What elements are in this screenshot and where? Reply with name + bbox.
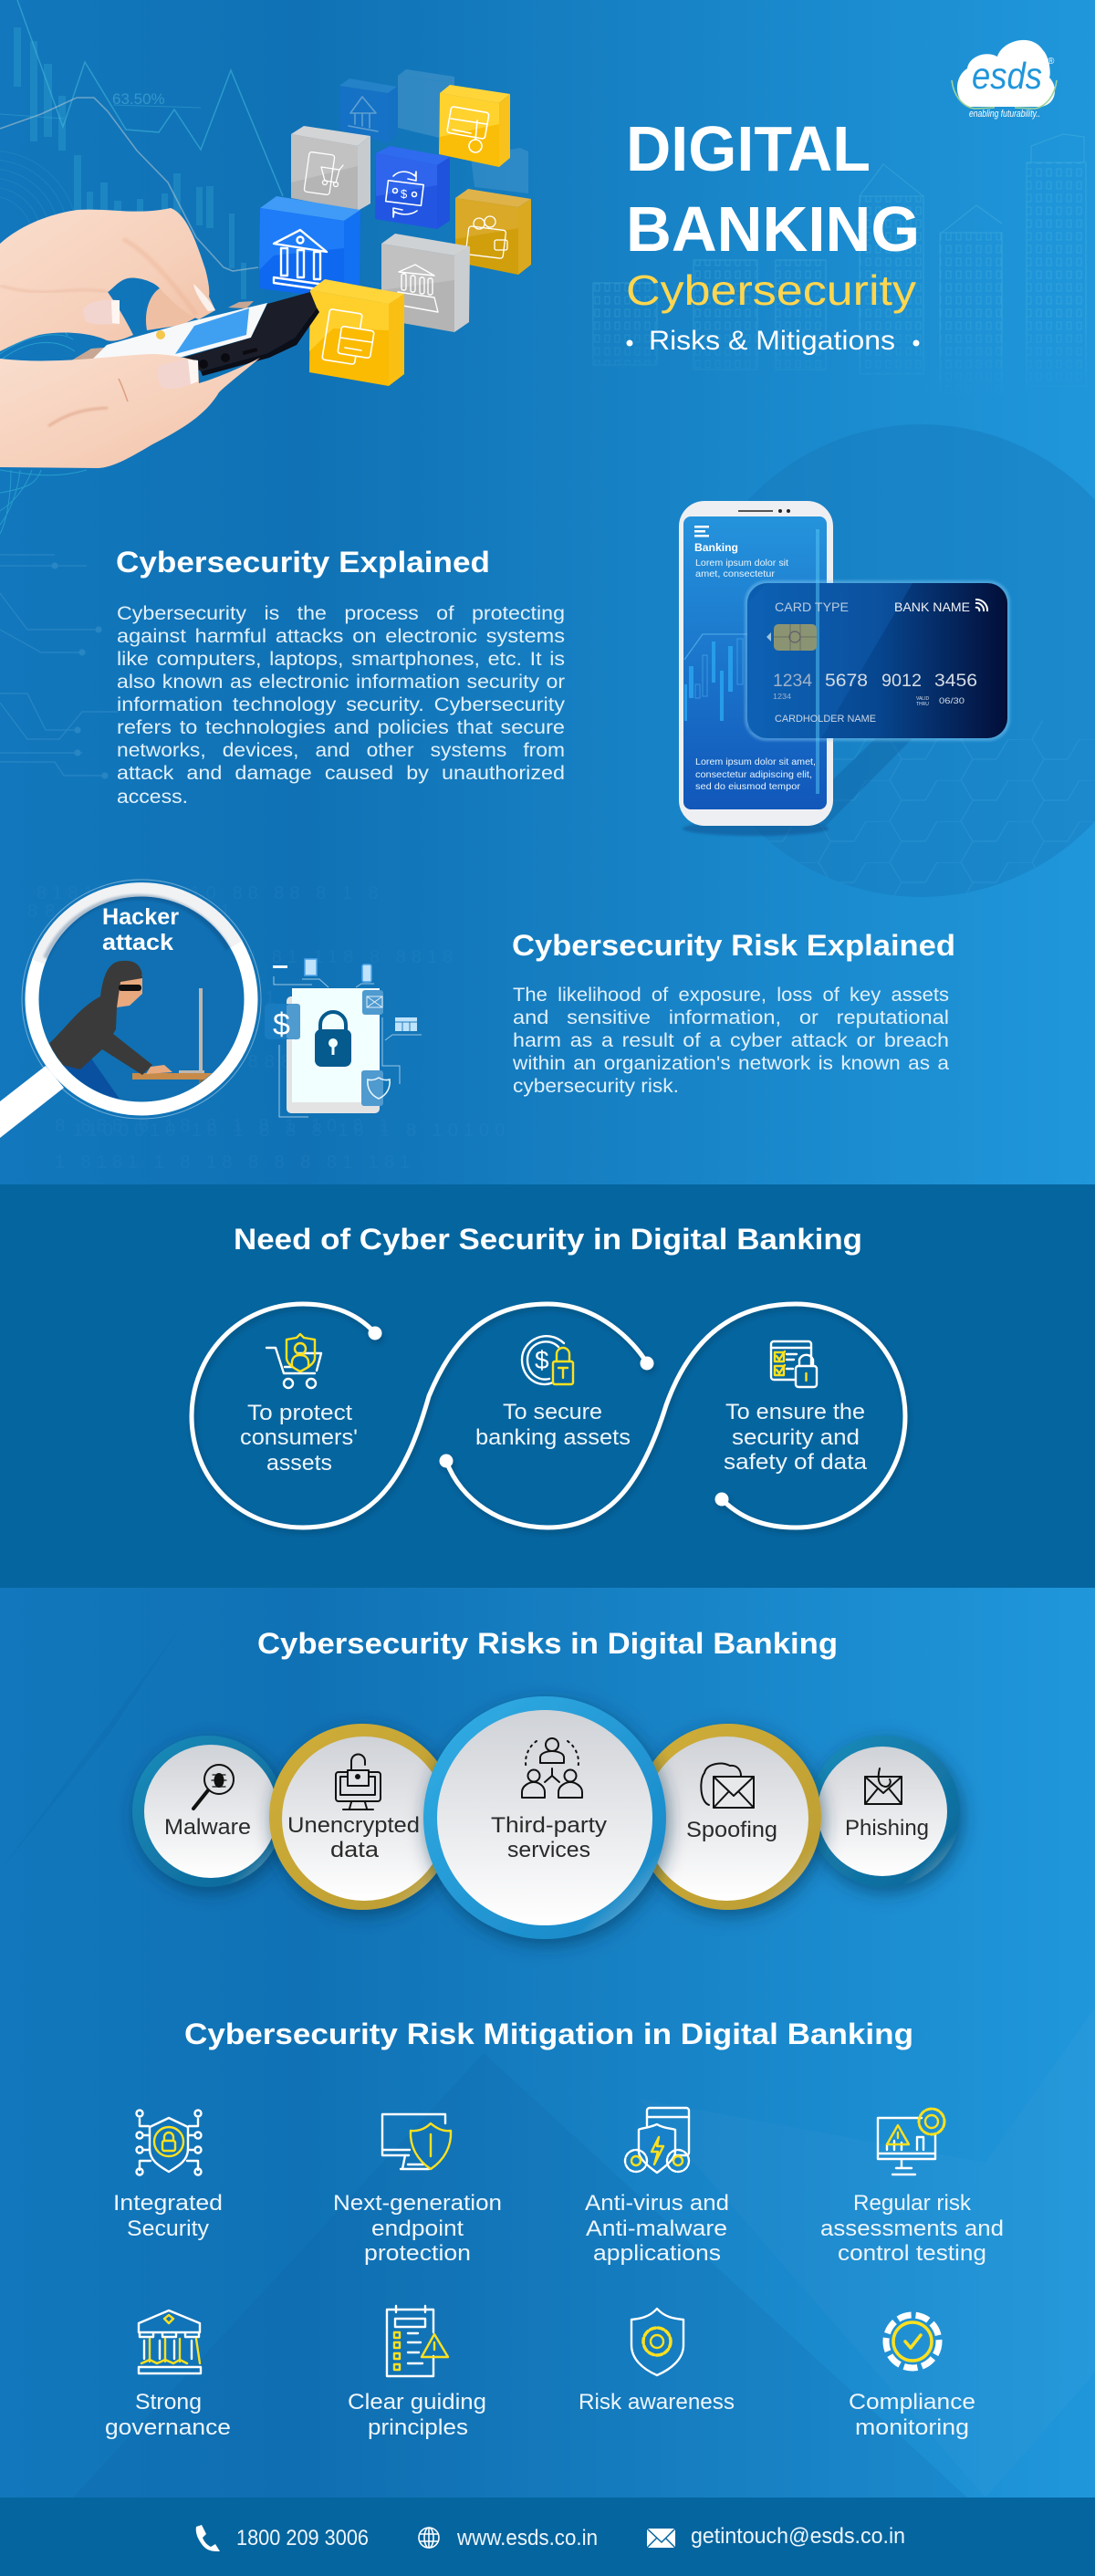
icon: phone <box>196 2525 220 2551</box>
hand: top <box>0 208 215 351</box>
item: antivirus <box>585 2108 729 2266</box>
magnifying glass: attack <box>102 930 173 955</box>
item: antivirus: applications <box>593 2241 721 2266</box>
text block: against harmful attacks on electronic systems <box>117 625 565 647</box>
icon: monitor shield <box>382 2114 451 2169</box>
text block: harm as a result of a cyber attack or breach <box>513 1029 949 1051</box>
logo: ® <box>1048 57 1055 67</box>
item: strong governance: Strong <box>135 2390 202 2414</box>
risk: phishing <box>808 1736 960 1887</box>
phone and bank card illustration <box>679 501 1010 836</box>
panel: need of cyber security <box>0 1184 1095 1588</box>
mobile phone <box>64 292 319 376</box>
heading: Cybersecurity Risks in Digital Banking <box>257 1627 838 1660</box>
faint cube <box>471 148 528 193</box>
security device <box>265 959 422 1117</box>
yellow cube: card key <box>439 85 510 167</box>
binary pattern: 81811 1 1 110 88 88 8 1 8 <box>36 883 384 903</box>
hand: bottom <box>0 354 260 468</box>
chart background: 63.50% <box>112 90 165 108</box>
bank card: CARDHOLDER NAME <box>775 714 876 725</box>
icon: bug magnifier <box>193 1765 234 1809</box>
panel: risk mitigation <box>105 2018 1004 2440</box>
binary pattern: 8188 8 8 8 888 8 81 118 8 8818 <box>36 947 458 967</box>
text block: and sensitive information, or reputational <box>513 1006 949 1028</box>
item: guiding principles <box>348 2306 486 2440</box>
title: DIGITAL <box>626 113 871 184</box>
item: endpoint protection: Next-generation <box>333 2191 502 2216</box>
bank card: 5678 <box>825 672 868 691</box>
binary pattern: 88 1 11010 81 <box>27 902 237 922</box>
bank card: 9012 <box>881 672 922 691</box>
item: compliance monitoring: Compliance <box>849 2390 975 2414</box>
bank card: 1234 <box>773 672 812 691</box>
text block: access. <box>117 786 188 808</box>
risk: third-party services: services <box>507 1838 590 1862</box>
phone: amet, consectetur <box>695 568 776 579</box>
item: antivirus: Anti-virus and <box>585 2191 729 2216</box>
heading: Cybersecurity Explained <box>116 546 490 579</box>
bank card: CARD TYPE <box>775 600 849 614</box>
footer <box>0 2498 1095 2576</box>
logo: enabling futurability.. <box>969 109 1040 120</box>
text block: cybersecurity risk. <box>513 1075 679 1097</box>
icon: coin lock <box>522 1336 573 1384</box>
item: antivirus: Anti-malware <box>586 2216 727 2241</box>
hacker attack illustration <box>0 880 422 1138</box>
text block: The likelihood of exposure, loss of key assets <box>513 984 949 1006</box>
title: Risks & Mitigations <box>649 326 895 356</box>
risk: malware <box>132 1736 284 1887</box>
icon: globe <box>419 2528 439 2548</box>
heading: Need of Cyber Security in Digital Banking <box>234 1223 862 1256</box>
icon: checklist warning <box>387 2306 448 2376</box>
icon: cloud envelope <box>701 1764 754 1808</box>
title: BANKING <box>626 193 920 265</box>
bank card: 06/30 <box>939 696 965 705</box>
text block: refers to technologies and policies that secure <box>117 716 565 738</box>
amber cube: wallet <box>455 189 531 275</box>
hacker label: Hacker <box>102 904 179 930</box>
binary pattern: 1100010 18 1 8 8 8 18 1 8 10100 <box>73 1121 510 1141</box>
title <box>626 113 920 356</box>
text block: also known as electronic information security or <box>117 671 565 693</box>
item: security and safety <box>724 1341 868 1475</box>
item: security and safety: To ensure the <box>725 1400 865 1424</box>
panel: cybersecurity explained <box>0 546 565 808</box>
icon: mail <box>647 2529 675 2548</box>
binary pattern: 11 8118 10 181 8 1 1 8 88 <box>27 988 375 1008</box>
risk: phishing: Phishing <box>845 1816 929 1841</box>
item: guiding principles: Clear guiding <box>348 2390 486 2414</box>
panel: hero <box>0 0 1086 534</box>
item: secure banking assets <box>475 1336 631 1450</box>
bank card: THRU <box>916 702 929 707</box>
item: protect assets <box>240 1334 358 1476</box>
faint cube <box>339 78 397 143</box>
item: integrated security: Integrated <box>113 2191 223 2216</box>
text block: like computers, laptops, smartphones, etc. It is <box>117 648 565 670</box>
icon: coin lock: $ <box>535 1346 549 1374</box>
panel: big circle with hexagon pattern <box>769 424 1095 897</box>
icon: hooked envelope <box>865 1768 902 1804</box>
icon: open lock monitor <box>336 1755 381 1809</box>
logo <box>952 40 1057 120</box>
bank card <box>745 529 1010 794</box>
risk: malware: Malware <box>164 1815 251 1840</box>
phone: Lorem ipsum dolor sit <box>695 558 788 568</box>
panel: cybersecurity risk explained <box>512 929 955 1097</box>
item: endpoint protection: protection <box>364 2241 471 2266</box>
item: protect assets: consumers' <box>240 1425 358 1450</box>
item: endpoint protection: endpoint <box>371 2216 464 2241</box>
risk: spoofing <box>635 1724 821 1910</box>
risk: unencrypted data <box>269 1724 455 1910</box>
icon: gear check <box>886 2315 939 2368</box>
item: risk awareness: Risk awareness <box>579 2390 735 2414</box>
bank card: BANK NAME <box>894 600 970 614</box>
icon: monitor warning gear <box>878 2109 944 2174</box>
item: risk assessments: Regular risk <box>853 2191 972 2216</box>
icon: cart shield <box>266 1334 321 1388</box>
icon: circuit shield <box>137 2110 201 2175</box>
text block <box>117 602 565 808</box>
blue cube: money exchange: $ <box>401 187 408 201</box>
binary pattern: 1 8181 1 8 18 8 8 8 81 181 <box>55 1152 415 1173</box>
heading: Cybersecurity Risk Explained <box>512 929 955 962</box>
item: protect assets: To protect <box>247 1401 352 1425</box>
phone <box>679 501 833 836</box>
phone: sed do eiusmod tempor <box>695 781 801 792</box>
blue cube: bank <box>259 196 360 299</box>
binary pattern: 110111 1 1110 818 8 1 0 <box>36 1016 359 1036</box>
risk: unencrypted data: data <box>330 1838 380 1862</box>
bank card: 3456 <box>934 672 977 691</box>
item: strong governance: governance <box>105 2415 231 2440</box>
footer: 1800 209 3006 <box>236 2526 369 2550</box>
text block: Cybersecurity is the process of protecting <box>117 602 565 624</box>
risk: unencrypted data: Unencrypted <box>287 1813 420 1838</box>
icon: shield gear <box>631 2309 683 2375</box>
security device: $ <box>273 1007 290 1042</box>
item: endpoint protection <box>333 2114 502 2266</box>
logo: esds <box>972 55 1042 97</box>
blue cube: money exchange <box>375 146 450 229</box>
item: protect assets: assets <box>266 1451 332 1476</box>
item: secure banking assets: To secure <box>503 1400 602 1424</box>
item: risk assessments <box>820 2109 1004 2266</box>
icon: governance building <box>139 2310 201 2373</box>
risk: third-party services <box>423 1696 666 1939</box>
item: integrated security <box>113 2110 223 2241</box>
text block: attack and damage caused by unauthorized <box>117 762 565 784</box>
title: Cybersecurity <box>626 266 916 314</box>
gray cube: mobile cart <box>291 126 370 211</box>
binary pattern: 1818 1 1018 8 8888 1 <box>36 1052 342 1072</box>
footer: getintouch@esds.co.in <box>691 2524 905 2549</box>
item: compliance monitoring <box>849 2315 975 2440</box>
heading: Cybersecurity Risk Mitigation in Digital Banking <box>184 2018 913 2050</box>
phone: consectetur adipiscing elit, <box>695 769 812 780</box>
item: security and safety: safety of data <box>724 1450 868 1475</box>
item: risk assessments: control testing <box>838 2241 986 2266</box>
text block <box>512 984 949 1097</box>
icon: checklist lock <box>771 1341 817 1387</box>
panel: cybersecurity risks <box>132 1627 960 1939</box>
magnifying glass <box>0 880 261 1138</box>
phone: Lorem ipsum dolor sit amet, <box>695 756 816 767</box>
item: risk awareness <box>579 2309 735 2414</box>
item: compliance monitoring: monitoring <box>855 2415 969 2440</box>
item: security and safety: security and <box>732 1425 860 1450</box>
yellow cube: mobile card <box>309 279 404 386</box>
item: guiding principles: principles <box>368 2415 468 2440</box>
bank card: 1234 <box>773 693 792 701</box>
item: risk assessments: assessments and <box>820 2216 1004 2241</box>
binary pattern <box>27 883 510 1173</box>
risk: spoofing: Spoofing <box>686 1818 777 1842</box>
bank card: VALID <box>916 696 929 702</box>
cubes <box>259 69 531 386</box>
gray cube: bank laptop <box>381 234 470 332</box>
faint cube <box>398 69 454 140</box>
item: secure banking assets: banking assets <box>475 1425 631 1450</box>
curve <box>192 1304 905 1528</box>
binary pattern: 8 888 8 18 8 1 8 1 10 8 1 <box>55 1116 394 1136</box>
icon: people network <box>522 1738 582 1798</box>
risk: third-party services: Third-party <box>491 1813 607 1838</box>
item: strong governance <box>105 2310 231 2440</box>
item: integrated security: Security <box>127 2216 209 2241</box>
phone: Banking <box>694 541 738 554</box>
icon: window shield gears <box>625 2108 689 2173</box>
footer: www.esds.co.in <box>456 2526 598 2550</box>
text block: information technology security. Cybersecurity <box>117 694 565 715</box>
text block: within an organization's network is known as a <box>512 1052 949 1074</box>
city skyline <box>593 133 1086 365</box>
chart background <box>0 0 283 534</box>
text block: networks, devices, and other systems from <box>117 739 565 761</box>
